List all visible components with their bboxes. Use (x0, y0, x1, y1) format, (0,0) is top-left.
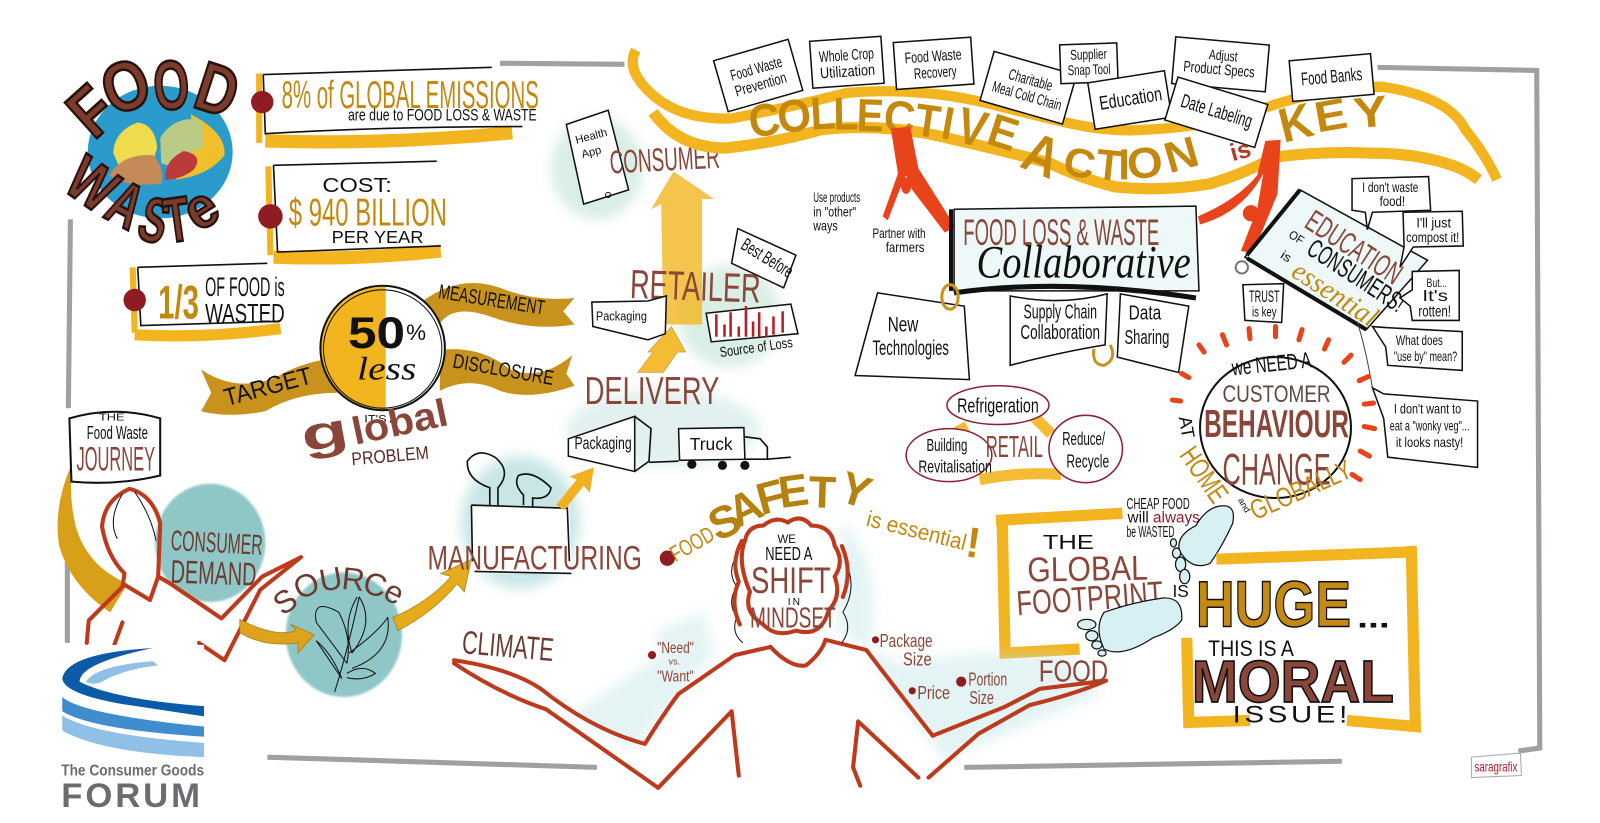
figure: woman's curly hair and mindset text: IN (788, 597, 802, 608)
diagram: retail triangle (906, 386, 1122, 483)
note: adjust product specs (1172, 37, 1269, 92)
logo: the consumer goods forum (61, 644, 204, 808)
badge: customer behaviour change (1172, 327, 1374, 498)
note: whole crop utilization: Whole Crop (818, 45, 874, 66)
text: consumer: CONSUMER (609, 138, 721, 180)
note: data sharing (1117, 294, 1189, 372)
icon: food scraps (109, 114, 225, 185)
banner lettering: T (1094, 140, 1124, 190)
speech bubble: i don't waste food: food! (1380, 194, 1405, 210)
banner lettering: C (745, 94, 783, 148)
wash: manufacturing blob (461, 456, 580, 589)
diagram: retail triangle: RETAIL (986, 430, 1043, 464)
heading: FOOD: O (151, 47, 192, 126)
text: saragrafix stamp: saragrafix (1474, 759, 1517, 775)
text: climate: CLIMATE (461, 623, 555, 668)
text: source (266, 559, 410, 622)
note: new technologies: Technologies (872, 336, 949, 360)
text: source: S (266, 580, 304, 622)
wash: consumer (551, 117, 643, 219)
banner lettering: A (1014, 121, 1069, 191)
text: source: U (316, 559, 345, 599)
bullet: portion size (956, 669, 1007, 708)
banner lettering: N (1159, 128, 1204, 183)
callout: trust is key: TRUST (1249, 288, 1280, 306)
text: source: e (379, 572, 410, 612)
text: the global footprint: THE (1043, 532, 1094, 554)
heading: WASTE: e (171, 173, 230, 243)
title: food waste emblem (52, 42, 248, 259)
text: food safety is essential: F (751, 469, 790, 525)
banner lettering: K (1273, 93, 1319, 154)
badge: customer behaviour change: we NEED A (1230, 347, 1312, 381)
heading: WASTE: W (53, 142, 131, 226)
stat box: one third of food wasted: WASTED (205, 298, 285, 328)
icon: best before card: Best Before (738, 234, 797, 282)
text: at home and globally (1173, 414, 1356, 526)
text: partner with farmers: farmers (886, 240, 924, 256)
note: food waste prevention (714, 39, 803, 112)
icon: packaging box (568, 416, 651, 471)
banner lettering: C (882, 92, 917, 145)
note: data sharing: Data (1129, 302, 1162, 324)
banner lettering: E (856, 90, 885, 142)
icon: footprint upper (1170, 506, 1233, 584)
figure: consumer (87, 489, 301, 660)
icon: ring connectors (942, 285, 1113, 365)
speech bubble: wonky veg: it looks nasty! (1396, 435, 1463, 451)
note: supply chain collaboration: Collaboration (1020, 322, 1100, 344)
panel: education of consumers (1236, 190, 1428, 334)
text: delivery: DELIVERY (585, 370, 719, 413)
heading: FOOD (52, 42, 248, 152)
note: food banks (1289, 54, 1374, 101)
icon: packaging box: Packaging (574, 433, 632, 453)
gold swoosh: journey path (58, 469, 128, 612)
stat box: 8% of global emissions: 8% of GLOBAL EMISSIONS (282, 74, 539, 117)
wash: delivery (566, 390, 760, 467)
panel: food loss and waste collaborative: Collaborative (977, 237, 1191, 289)
panel: huge moral issue frame (1187, 546, 1415, 727)
figure: woman with open arms (454, 640, 1106, 788)
bullet: need vs want: vs. (668, 656, 680, 666)
title card: the food waste journey: THE (99, 412, 125, 423)
panel: education of consumers: CONSUMERS! (1302, 233, 1411, 318)
text: retailer: RETAILER (629, 261, 761, 312)
text: use products in other ways: in "other" (813, 204, 856, 220)
text: source: C (359, 564, 391, 605)
icon: truck: Truck (690, 434, 733, 454)
bullet: need vs want: "Want" (657, 669, 694, 686)
wash: retailer (679, 265, 781, 367)
wash: consumer demand blob (155, 484, 265, 602)
note: charitable meal cold chain: Charitable (1006, 66, 1054, 95)
panel: global footprint frame (996, 513, 1122, 653)
icon: footprint lower (1078, 598, 1182, 656)
stat box: 8% of global emissions: are due to FOOD LOSS & WASTE (348, 106, 537, 124)
text: saragrafix stamp (1471, 753, 1521, 778)
badge: customer behaviour change: CUSTOMER (1222, 381, 1331, 408)
title card: the food waste journey: JOURNEY (77, 440, 155, 478)
heading: WASTE: A (95, 167, 156, 243)
bullet: portion size: Portion (968, 669, 1007, 690)
icon: phone health app (566, 110, 629, 204)
text: at home and globally: HOME (1173, 441, 1234, 509)
speech bubble: what does use by mean: What does (1396, 333, 1443, 349)
banner lettering (745, 87, 1390, 191)
text: huge: ... (1357, 601, 1390, 635)
icon: plant (316, 597, 388, 692)
speech bubble: wonky veg: I don't want to (1394, 401, 1461, 417)
figure: woman's curly hair and mindset text: NEED A (765, 543, 813, 564)
text: food safety is essential (660, 461, 984, 568)
paper frame (67, 63, 1540, 767)
text: cheap food will always be wasted: CHEAP FOOD (1127, 496, 1190, 513)
text: cheap food will always be wasted: will always (1127, 509, 1200, 526)
text: food safety is essential: S (700, 492, 749, 551)
figure: orange hanger left (883, 127, 955, 233)
text: this is a: THIS IS A (1208, 636, 1294, 661)
text: food safety is essential: FOOD (666, 521, 719, 567)
callout: trust is key (1243, 284, 1284, 322)
text: the global footprint (1015, 532, 1189, 623)
banner lower edge (653, 112, 1479, 189)
icon: packaging card (592, 296, 666, 340)
panel: education of consumers: essential (1286, 255, 1383, 334)
sunburst rays (1172, 327, 1374, 480)
text: moral: MORAL (1192, 648, 1394, 715)
text: cheap food will always be wasted (1127, 496, 1200, 541)
note: education (1088, 71, 1172, 129)
note: date labeling: Date Labeling (1178, 90, 1255, 133)
banner lettering: I (938, 98, 958, 150)
circle: building revitalisation: Building (927, 435, 967, 455)
note: food banks: Food Banks (1300, 63, 1363, 89)
speech bubble: i'll just compost it: compost it! (1406, 230, 1459, 246)
title card: the food waste journey (69, 412, 160, 483)
text: the global footprint: GLOBAL (1027, 550, 1148, 590)
stat box: one third of food wasted (123, 263, 285, 336)
logo text: the consumer goods: The Consumer Goods (61, 763, 204, 780)
arrow: delivery to retailer (638, 327, 686, 372)
text: the global footprint: IS (1172, 581, 1189, 601)
arrow: to source (240, 619, 314, 653)
figure: woman's curly hair and mindset text (732, 519, 851, 643)
speech bubble: i'll just compost it: I'll just (1416, 216, 1451, 232)
logo mark: blue swoosh arcs (62, 648, 204, 757)
banner lettering: Y (1351, 87, 1390, 139)
note: adjust product specs: Adjust (1208, 47, 1238, 66)
note: charitable meal cold chain: Meal Cold Chain (990, 78, 1064, 114)
text: food safety is essential: ! (963, 519, 984, 568)
text: source: O (288, 564, 324, 607)
speech bubble: i'll just compost it (1400, 211, 1463, 267)
stat box: one third of food wasted: 1/3 (158, 276, 199, 328)
circle: refrigeration: Refrigeration (957, 395, 1039, 417)
note: food waste prevention: Prevention (733, 69, 789, 100)
speech bubble: i don't waste food (1352, 177, 1431, 230)
speech bubble: wonky veg (1357, 321, 1478, 467)
speech bubble: but it's rotten: It's (1422, 288, 1448, 305)
text: at home and globally: and (1236, 496, 1252, 514)
note: food waste prevention: Food Waste (729, 54, 784, 85)
text: issue: ISSUE! (1233, 701, 1351, 728)
callout: trust is key: is key (1252, 304, 1277, 320)
ribbon: measurement: MEASUREMENT (437, 281, 546, 320)
text: use products in other ways: Use products (813, 190, 860, 206)
note: date labeling (1165, 77, 1268, 147)
bullet: price (909, 682, 950, 703)
circle: building revitalisation: Revitalisation (918, 456, 992, 476)
title card: the food waste journey: Food Waste (87, 422, 148, 443)
text: source: R (340, 560, 367, 598)
note: new technologies: New (888, 313, 919, 337)
arrow: retailer to consumer (651, 171, 714, 325)
bullet: need vs want: "Need" (657, 640, 694, 657)
note: supplier snap tool (1060, 43, 1118, 84)
stat box: cost 940 billion: $ 940 BILLION (289, 192, 447, 235)
speech bubble: but it's rotten: But... (1427, 276, 1447, 290)
banner lettering: O (1125, 138, 1165, 189)
badge: 50% less (320, 286, 445, 410)
heading: FOOD: D (186, 47, 248, 133)
note: supplier snap tool: Supplier (1070, 47, 1107, 64)
wash: source blob (286, 572, 402, 697)
bullet: package size: Package (880, 630, 933, 651)
text: it's a global problem: lobal (348, 392, 452, 454)
heading: FOOD: F (52, 70, 131, 152)
text: it's a global problem: g (297, 403, 352, 462)
icon: blue plate (88, 86, 233, 218)
icon: phone health app: App (580, 144, 603, 161)
logo text: forum: FORUM (61, 777, 200, 815)
heading: FOOD: O (91, 42, 161, 131)
note: supplier snap tool: Snap Tool (1067, 62, 1111, 79)
ribbon: disclosure: DISCLOSURE (451, 351, 555, 390)
note: food waste recovery: Recovery (913, 63, 958, 83)
badge: 50% less: less (357, 352, 416, 388)
chart: source of loss (706, 304, 798, 361)
ribbon: target (201, 357, 346, 415)
text: food safety is essential: E (775, 463, 812, 518)
circle: refrigeration (947, 386, 1049, 425)
note: adjust product specs: Product Specs (1183, 58, 1256, 82)
banner lettering: V (951, 97, 993, 159)
text: food safety is essential: T (808, 466, 837, 518)
banner: collective action key (633, 50, 1497, 191)
text: food safety is essential: Y (834, 461, 878, 519)
text: manufacturing: MANUFACTURING (428, 539, 642, 577)
speech bubble: but it's rotten: rotten! (1418, 303, 1451, 320)
speech bubble: what does use by mean: "use by" mean? (1394, 349, 1457, 365)
panel: food loss and waste collaborative: FOOD LOSS & WASTE (963, 212, 1159, 253)
figure: woman's curly hair and mindset text: SHIFT (751, 560, 831, 601)
ribbon: target: TARGET (221, 363, 315, 412)
banner lettering: C (1059, 137, 1100, 189)
arrow: to manufacturing (393, 559, 471, 631)
banner lettering: I (1118, 140, 1130, 189)
stat box: cost 940 billion (258, 161, 447, 258)
figure: orange hanger right (1198, 140, 1281, 253)
speech bubble: wonky veg: eat a "wonky veg"... (1390, 419, 1469, 435)
banner lettering: L (833, 89, 859, 140)
bullet: need vs want (648, 640, 694, 686)
stat box: 8% of global emissions (251, 67, 539, 143)
badge: 50% less: 50 (348, 307, 405, 358)
icon: phone health app: Health (574, 127, 609, 147)
note: supply chain collaboration (1010, 294, 1107, 365)
wash: mindset figure (510, 520, 1102, 760)
note: new technologies (855, 293, 969, 380)
circle: building revitalisation (906, 429, 992, 482)
badge: customer behaviour change: BEHAVIOUR (1204, 403, 1349, 446)
text: food safety is essential: is essential (864, 506, 969, 555)
note: whole crop utilization (810, 36, 884, 88)
speech bubble: i don't waste food: I don't waste (1362, 180, 1418, 196)
icon: truck (649, 428, 791, 470)
note: education: Education (1098, 83, 1164, 115)
icon: factory with trees (467, 453, 571, 573)
banner upper edge (633, 50, 1497, 180)
note: food waste recovery: Food Waste (904, 46, 962, 67)
figure: woman's curly hair and mindset text: WE (778, 532, 796, 546)
banner lettering: E (1310, 88, 1351, 142)
banner lettering: E (982, 105, 1025, 162)
stat box: cost 940 billion: COST: (322, 175, 392, 197)
banner lettering: O (774, 89, 814, 144)
text: at home and globally: GLOBALLY (1245, 454, 1356, 526)
note: data sharing: Sharing (1124, 327, 1169, 349)
heading: WASTE: T (159, 183, 195, 257)
bullet: portion size: Size (969, 687, 994, 708)
speech bubble: but it's rotten (1400, 270, 1459, 320)
panel: education of consumers: OF (1286, 228, 1307, 248)
text: use products in other ways (813, 190, 860, 235)
icon: packaging card: Packaging (596, 308, 647, 323)
circle: reduce recycle: Reduce/ (1062, 428, 1106, 449)
icon: best before card (732, 229, 797, 288)
bullet: price: Price (917, 682, 950, 703)
text: consumer demand: DEMAND (170, 553, 257, 593)
text: the global footprint: FOOTPRINT (1015, 575, 1164, 623)
banner lettering: T (912, 95, 944, 149)
stat box: one third of food wasted: OF FOOD is (205, 272, 285, 302)
stat box: cost 940 billion: PER YEAR (332, 227, 423, 247)
text: at home and globally: AT (1175, 414, 1199, 440)
text: huge: HUGE (1196, 568, 1351, 641)
text: food: FOOD (1039, 655, 1108, 689)
note: food waste recovery (893, 37, 974, 89)
text: it's a global problem (297, 392, 452, 469)
panel: education of consumers: is (1278, 248, 1294, 265)
arrow: to delivery (556, 467, 594, 510)
text: partner with farmers (872, 226, 926, 256)
chart: source of loss: Source of Loss (719, 335, 794, 361)
badge: customer behaviour change: CHANGE (1222, 444, 1331, 495)
text: cheap food will always be wasted: be WASTED (1127, 524, 1174, 541)
heading: WASTE (53, 142, 230, 259)
text: consumer demand: CONSUMER (170, 525, 263, 562)
text: use products in other ways: ways (813, 219, 838, 235)
text: partner with farmers: Partner with (872, 226, 926, 242)
figure: woman's curly hair and mindset text: MINDSET (750, 603, 836, 635)
note: supply chain collaboration: Supply Chain (1023, 301, 1097, 323)
panel: education of consumers: EDUCATION (1299, 204, 1408, 291)
heading: WASTE: S (130, 184, 178, 259)
text: it's a global problem: IT'S A (364, 413, 399, 425)
circle: reduce recycle: Recycle (1066, 450, 1109, 471)
banner lettering: L (809, 88, 837, 140)
text: it's a global problem: PROBLEM (351, 442, 430, 469)
text: banner word is: is (1227, 136, 1254, 167)
text: consumer demand (170, 525, 263, 593)
badge: 50% less: % (406, 320, 426, 345)
note: whole crop utilization: Utilization (819, 62, 876, 82)
circle: reduce recycle (1049, 415, 1122, 483)
bullet: package size (872, 630, 933, 669)
speech bubble: what does use by mean (1372, 327, 1462, 370)
panel: food loss and waste collaborative (951, 206, 1199, 298)
text: food safety is essential: A (719, 478, 770, 538)
note: charitable meal cold chain (980, 51, 1077, 124)
bullet: package size: Size (903, 648, 932, 669)
